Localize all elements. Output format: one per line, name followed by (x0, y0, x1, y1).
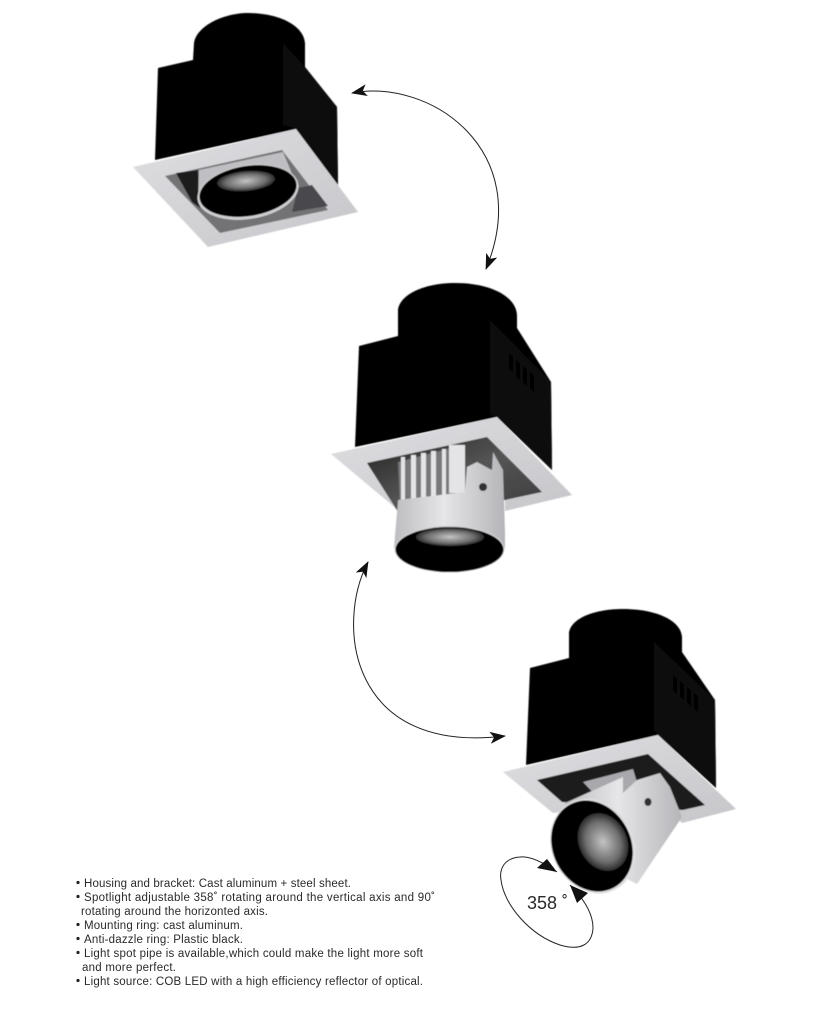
specification list: Anti-dazzle ring: Plastic black. (84, 934, 243, 946)
specification list: Light source: COB LED with a high efficiency reflector of optical. (84, 976, 423, 988)
specification list: Light spot pipe is available,which could make the light more soft (84, 948, 424, 960)
specification list: Spotlight adjustable 358˚ rotating around the vertical axis and 90˚ (84, 892, 435, 904)
light fixture: half extended (middle) (331, 283, 572, 572)
specification list: and more perfect. (82, 962, 176, 974)
light fixture: tilted (bottom) (503, 609, 736, 908)
vent slots (673, 675, 698, 712)
curved double arrow: middle to bottom (354, 562, 505, 738)
rotation label: 358 ˚ (527, 893, 568, 913)
specification list: rotating around the horizonted axis. (81, 906, 268, 918)
specification list (76, 878, 435, 988)
rotation arrow: 358 degrees (501, 857, 593, 947)
light fixture: recessed position (top) (133, 13, 358, 247)
specification list: Housing and bracket: Cast aluminum + steel sheet. (84, 878, 351, 890)
specification list: Mounting ring: cast aluminum. (84, 920, 243, 932)
vent slots (509, 353, 534, 392)
curved double arrow: top to middle (352, 91, 499, 269)
